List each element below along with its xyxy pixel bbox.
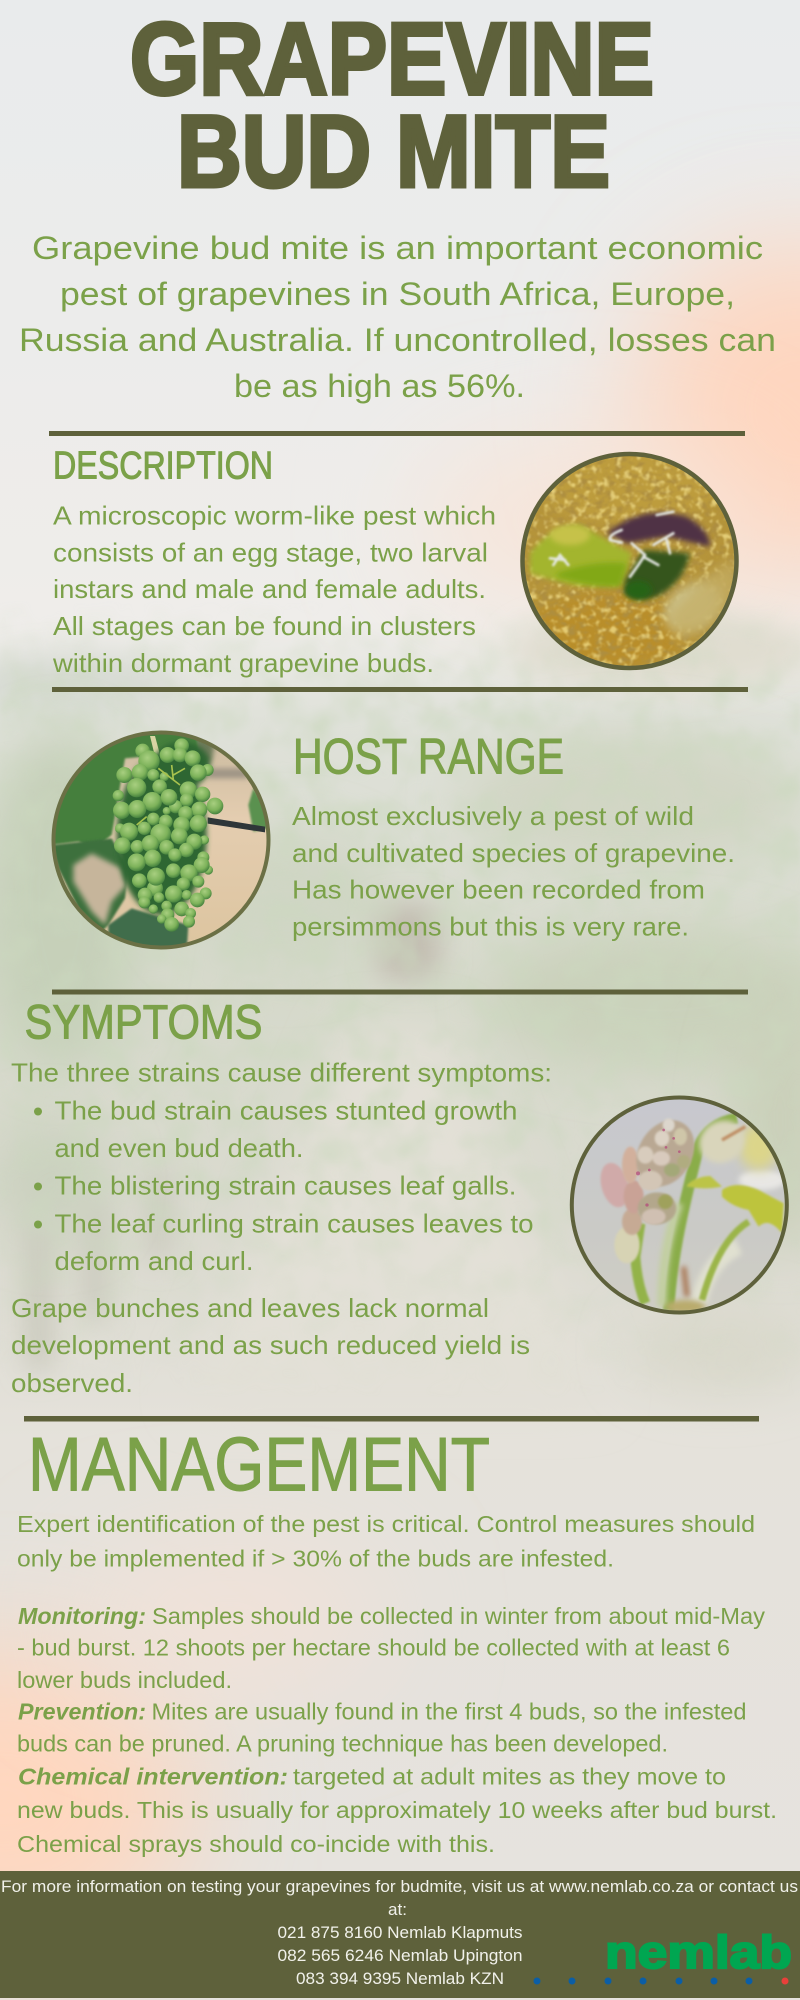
panel: host range <box>45 725 735 960</box>
panel: description <box>52 440 750 680</box>
host range text: persimmons but this is very rare. <box>292 912 689 942</box>
monitoring text: lower buds included. <box>17 1667 232 1693</box>
description text: A microscopic worm-like pest which <box>53 500 496 530</box>
panel: management <box>17 1422 777 1857</box>
chemical intervention text: Chemical sprays should co-incide with this. <box>17 1831 495 1857</box>
heading: symptoms: SYMPTOMS <box>24 996 262 1050</box>
footer contact text: 082 565 6246 Nemlab Upington <box>278 1946 522 1965</box>
title <box>130 2 654 208</box>
description text: within dormant grapevine buds. <box>52 648 434 678</box>
heading: description: DESCRIPTION <box>53 444 273 488</box>
intro text: be as high as 56%. <box>234 368 525 404</box>
chemical intervention text: new buds. This is usually for approximately 10 weeks after bud burst. <box>17 1797 777 1823</box>
monitoring text <box>17 1603 765 1693</box>
intro text <box>19 230 776 404</box>
host range text: Almost exclusively a pest of wild <box>292 801 694 831</box>
footer contact text: at: <box>388 1900 407 1919</box>
symptoms bullet list: The leaf curling strain causes leaves to <box>54 1208 534 1238</box>
prevention text: buds can be pruned. A pruning technique has been developed. <box>17 1730 668 1756</box>
management intro: Expert identification of the pest is critical. Control measures should <box>17 1511 755 1537</box>
monitoring text: - bud burst. 12 shoots per hectare should be collected with at least 6 <box>17 1634 730 1660</box>
footer contact text: 083 394 9395 Nemlab KZN <box>296 1969 504 1988</box>
photo: bud close-up <box>520 452 739 670</box>
symptoms bullet list <box>34 1096 534 1276</box>
symptoms closing text: observed. <box>11 1368 133 1398</box>
description text: consists of an egg stage, two larval <box>53 538 488 568</box>
chemical intervention text <box>17 1764 777 1857</box>
chemical intervention text: Chemical intervention: <box>18 1764 288 1790</box>
chemical intervention text: targeted at adult mites as they move to <box>293 1764 726 1790</box>
symptoms bullet list: The bud strain causes stunted growth <box>54 1096 518 1126</box>
monitoring text: Monitoring: <box>18 1603 146 1629</box>
symptoms closing text <box>11 1293 530 1398</box>
symptoms bullet list: The blistering strain causes leaf galls. <box>54 1170 516 1200</box>
symptoms closing text: Grape bunches and leaves lack normal <box>11 1293 489 1323</box>
title: GRAPEVINE <box>130 2 654 116</box>
footer contact text: For more information on testing your grapevines for budmite, visit us at www.nemlab.co.za or contact us <box>1 1877 798 1896</box>
prevention text <box>17 1698 746 1756</box>
footer bar <box>0 1871 800 1998</box>
photo: deformed bud shoot <box>570 1096 789 1314</box>
monitoring text: Samples should be collected in winter from about mid-May <box>152 1603 765 1629</box>
host range text: and cultivated species of grapevine. <box>292 838 735 868</box>
symptoms closing text: development and as such reduced yield is <box>11 1330 530 1360</box>
description text <box>52 500 496 678</box>
panel: symptoms <box>11 996 797 1398</box>
title: BUD MITE <box>177 94 610 208</box>
prevention text: Prevention: <box>18 1698 146 1724</box>
footer contact text: 021 875 8160 Nemlab Klapmuts <box>278 1923 522 1942</box>
description text: All stages can be found in clusters <box>53 611 476 641</box>
management intro <box>17 1511 755 1572</box>
logo: nemlab <box>534 1926 792 1984</box>
intro text: Grapevine bud mite is an important economic <box>32 230 763 266</box>
intro text: Russia and Australia. If uncontrolled, losses can <box>19 322 776 358</box>
management intro: only be implemented if > 30% of the buds are infested. <box>17 1546 614 1572</box>
heading: management: MANAGEMENT <box>28 1422 490 1508</box>
prevention text: Mites are usually found in the first 4 buds, so the infested <box>152 1698 746 1724</box>
description text: instars and male and female adults. <box>53 574 486 604</box>
symptoms bullet list: and even bud death. <box>54 1133 304 1163</box>
symptoms bullet list: deform and curl. <box>54 1246 254 1276</box>
host range text: Has however been recorded from <box>292 874 705 904</box>
host range text <box>292 801 735 942</box>
symptoms intro: The three strains cause different symptoms: <box>11 1058 552 1088</box>
heading: host range: HOST RANGE <box>293 728 564 784</box>
photo: grape bunch <box>52 730 270 950</box>
intro text: pest of grapevines in South Africa, Europe, <box>60 276 735 312</box>
logo: nemlab: nemlab <box>605 1926 792 1978</box>
footer contact text <box>1 1877 798 1988</box>
